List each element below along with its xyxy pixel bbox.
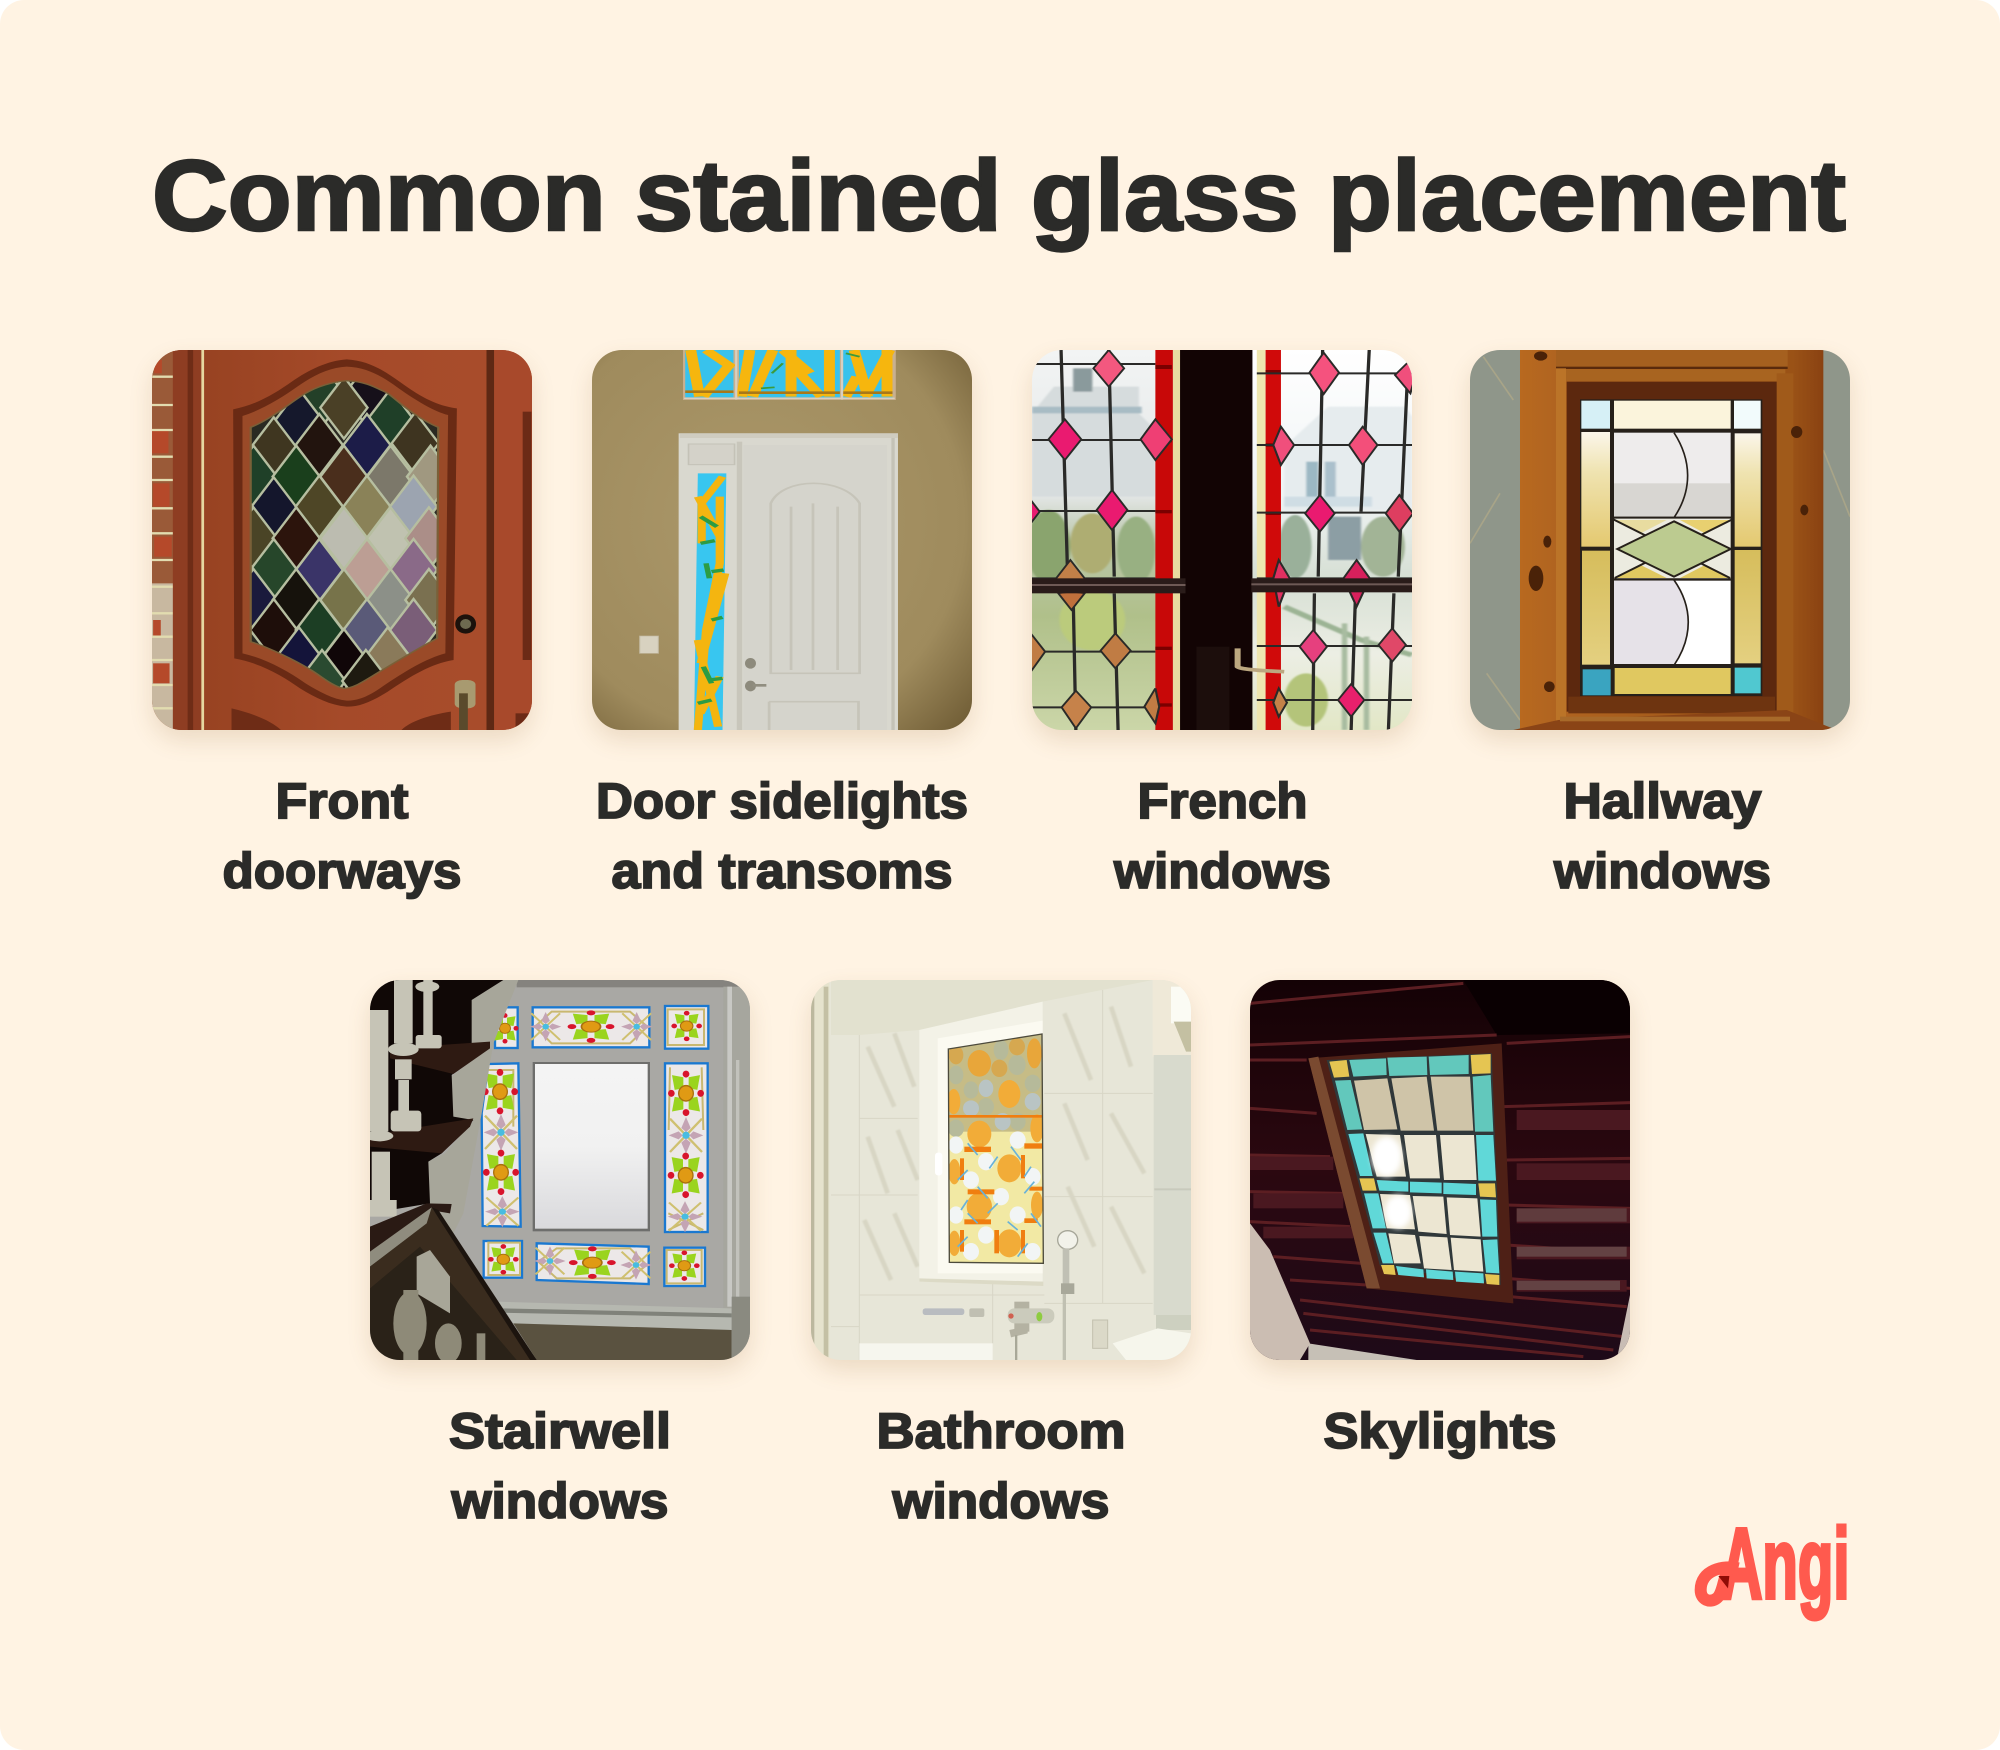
label: hallway windows: windows <box>1553 843 1771 899</box>
photo: bathroom window among marble tile <box>811 980 1191 1360</box>
title: Common stained glass placement <box>152 140 1846 252</box>
label: hallway windows: Hallway <box>1564 773 1762 829</box>
label: bathroom windows <box>876 1403 1126 1529</box>
label: french windows: French <box>1138 773 1308 829</box>
label: front doorways: doorways <box>222 843 462 899</box>
icon: transom stained glass <box>683 350 896 400</box>
label: skylights: Skylights <box>1324 1403 1556 1459</box>
label: hallway windows <box>1553 773 1771 899</box>
photo: white door with bamboo sidelight and transom <box>592 350 972 730</box>
label: door sidelights and transoms: Door sidelights <box>596 773 968 829</box>
label: front doorways: Front <box>276 773 409 829</box>
label: bathroom windows: windows <box>891 1473 1110 1529</box>
label: stairwell windows: Stairwell <box>449 1403 671 1459</box>
photo: hallway window in pine frame <box>1470 350 1850 730</box>
label: door sidelights and transoms: and transoms <box>612 843 952 899</box>
logo: Angi: Angi <box>1720 1508 1850 1620</box>
label: door sidelights and transoms <box>596 773 968 899</box>
label: bathroom windows: Bathroom <box>876 1403 1126 1459</box>
logo: Angi <box>1701 1508 1850 1620</box>
label: stairwell windows: windows <box>450 1473 668 1529</box>
icon: stained glass pane <box>946 1030 1044 1263</box>
label: front doorways <box>222 773 462 899</box>
icon: stained glass window <box>1580 399 1762 696</box>
photo: french windows with red and pink diamond glass <box>1021 350 1416 730</box>
photo: stained glass skylight in dark wood ceiling <box>1250 980 1630 1360</box>
panel: bathroom windows <box>811 980 1191 1529</box>
panel: door sidelights and transoms <box>592 350 972 899</box>
icon: sidelight stained glass <box>694 473 726 730</box>
panel: skylights <box>1250 980 1630 1459</box>
panel: hallway windows <box>1470 350 1850 899</box>
label: french windows: windows <box>1113 843 1331 899</box>
stair underside wall <box>427 980 518 1233</box>
photo: wooden front door with leaded diamond glass <box>152 350 532 730</box>
label: stairwell windows <box>449 1403 671 1529</box>
panel: front doorways <box>152 350 532 899</box>
photo: stairwell window with coloured border panes <box>365 980 750 1363</box>
label: french windows <box>1113 773 1331 899</box>
panel: stairwell windows <box>365 980 750 1529</box>
icon: stained glass panes <box>482 1006 708 1286</box>
panel: french windows <box>1021 350 1416 899</box>
